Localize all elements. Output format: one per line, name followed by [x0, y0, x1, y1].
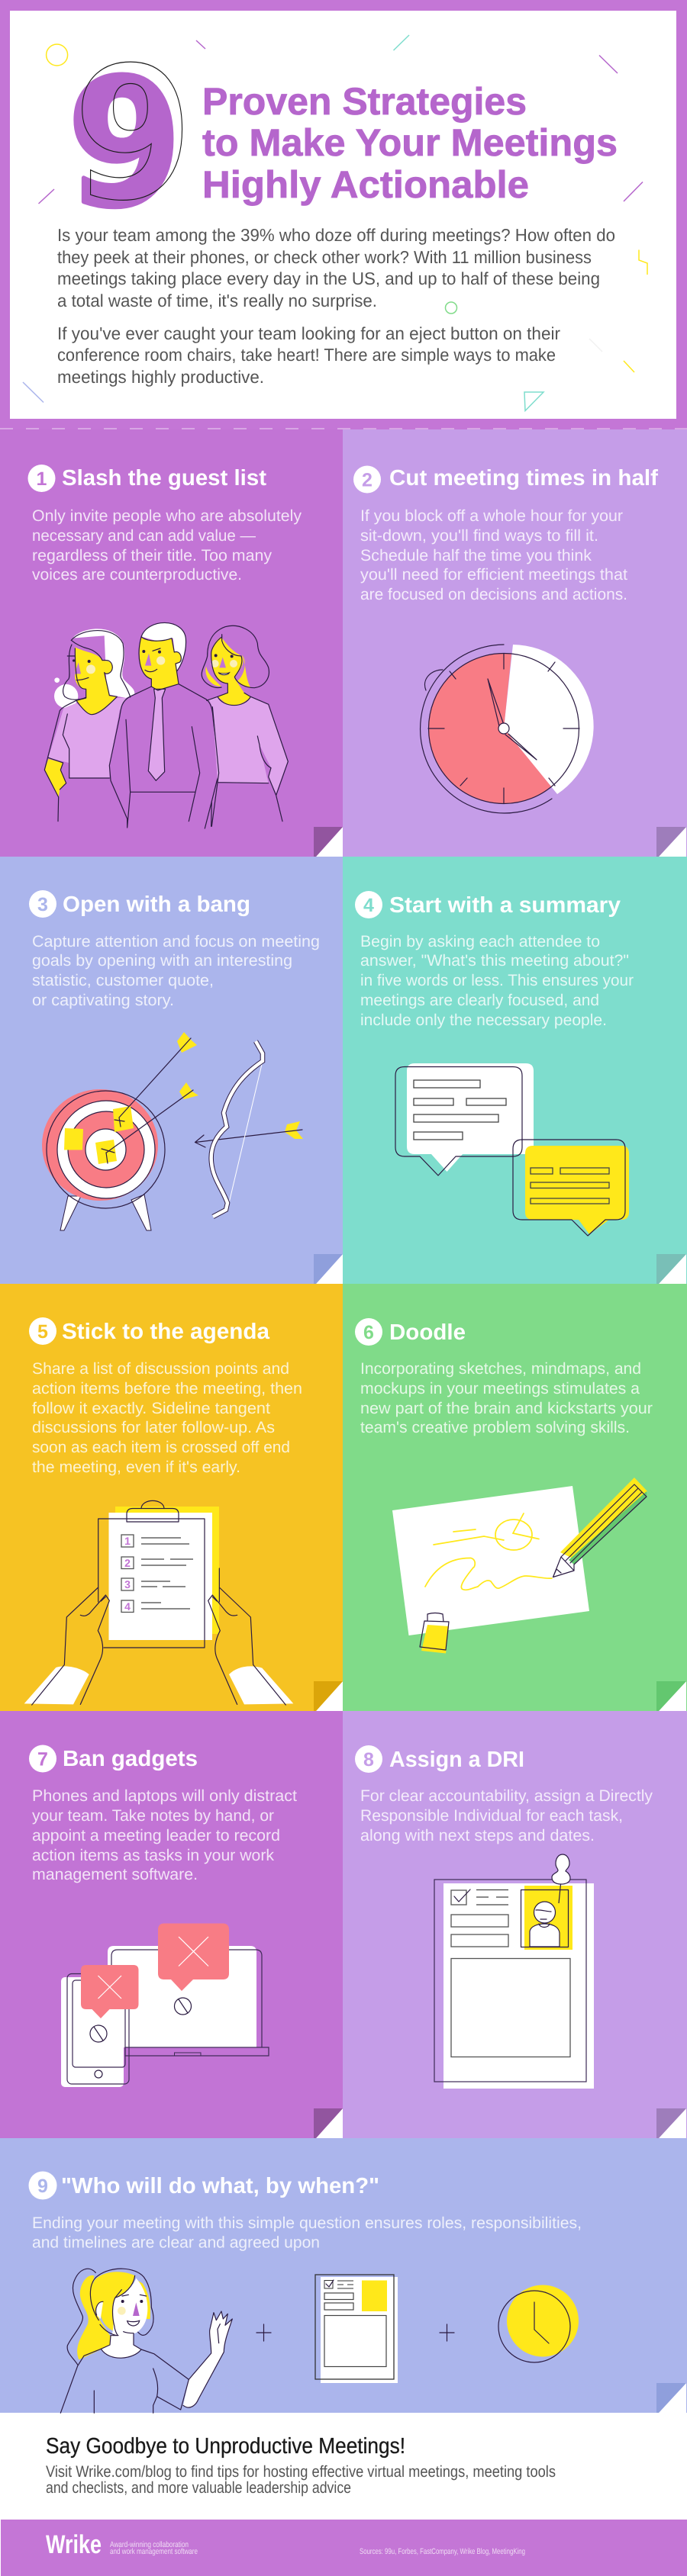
- plus sign: [440, 2324, 454, 2341]
- closing heading: Say Goodbye to Unproductive Meetings!: [46, 2434, 405, 2459]
- panel 6: doodle: [343, 1284, 687, 1711]
- illustration: clock: [498, 2285, 579, 2362]
- illustration: stopwatch: [421, 645, 594, 813]
- panel 2: cut meeting times in half: [343, 429, 687, 857]
- plus sign: [256, 2324, 271, 2341]
- illustration: clipboard and hands: 1: [124, 1535, 131, 1547]
- body text 4: in five words or less. This ensures your: [360, 972, 634, 989]
- panel 7: ban gadgets: [0, 1711, 343, 2138]
- big number nine: 9: [67, 43, 182, 246]
- heading 1: Slash the guest list: [62, 466, 266, 490]
- body text 7: Phones and laptops will only distract: [32, 1787, 297, 1805]
- heading 7: 7: [37, 1748, 48, 1770]
- body text 5: discussions for later follow-up. As: [32, 1419, 275, 1436]
- body text 3: [32, 933, 320, 1009]
- body text 1: [32, 507, 302, 584]
- body text 5: [32, 1360, 302, 1476]
- title: Highly Actionable: [202, 163, 529, 206]
- body text 6: team's creative problem solving skills.: [360, 1419, 630, 1436]
- panel 4: start with a summary: [343, 857, 687, 1284]
- body text 5: Share a list of discussion points and: [32, 1360, 289, 1378]
- big number nine: 9: [73, 27, 193, 241]
- illustration: speech bubbles: [395, 1063, 629, 1236]
- body text 2: are focused on decisions and actions.: [360, 586, 627, 603]
- illustration: clipboard and hands: 2: [124, 1557, 131, 1569]
- heading 5: 5: [37, 1321, 48, 1343]
- heading 7: Ban gadgets: [63, 1747, 198, 1771]
- body text 3: statistic, customer quote,: [32, 972, 214, 989]
- closing text: Visit Wrike.com/blog to find tips for hosting effective virtual meetings, meeting tools: [46, 2463, 556, 2481]
- intro text: they peek at their phones, or check other work? With 11 million business: [57, 247, 592, 267]
- body text 4: include only the necessary people.: [360, 1011, 607, 1029]
- heading 3: 3: [37, 894, 48, 915]
- body text 8: [360, 1787, 653, 1844]
- illustration: document: [315, 2275, 398, 2383]
- illustration: paper, pencil, eraser: [392, 1478, 647, 1654]
- body text 4: meetings are clearly focused, and: [360, 992, 599, 1009]
- tagline: and work management software: [110, 2547, 198, 2556]
- heading 4: 4: [363, 895, 374, 916]
- body text 4: answer, "What's this meeting about?": [360, 952, 629, 970]
- body text 3: or captivating story.: [32, 992, 174, 1009]
- heading 3: Open with a bang: [63, 892, 250, 917]
- illustration: three people: [44, 622, 288, 828]
- body text 5: soon as each item is crossed off end: [32, 1439, 290, 1456]
- illustration: waving woman: [60, 2269, 232, 2413]
- title: to Make Your Meetings: [202, 121, 618, 164]
- body text 6: new part of the brain and kickstarts your: [360, 1400, 653, 1417]
- body text 5: action items before the meeting, then: [32, 1380, 302, 1397]
- heading 8: Assign a DRI: [389, 1748, 524, 1772]
- body text 9: [32, 2214, 582, 2252]
- body text 8: Responsible Individual for each task,: [360, 1807, 623, 1825]
- panel 8: assign a DRI: [343, 1711, 687, 2138]
- body text 4: Begin by asking each attendee to: [360, 933, 600, 950]
- panel 5: stick to the agenda: [0, 1284, 343, 1711]
- body text 9: and timelines are clear and agreed upon: [32, 2233, 320, 2252]
- body text 7: action items as tasks in your work: [32, 1847, 274, 1864]
- body text 5: follow it exactly. Sideline tangent: [32, 1400, 270, 1417]
- body text 8: For clear accountability, assign a Directly: [360, 1787, 653, 1805]
- body text 2: you'll need for efficient meetings that: [360, 566, 627, 584]
- heading 4: Start with a summary: [389, 893, 621, 918]
- intro text: [57, 225, 615, 387]
- illustration: laptop and phone: [61, 1924, 269, 2087]
- illustration: target with arrows and bow: [42, 1032, 303, 1230]
- body text 3: goals by opening with an interesting: [32, 952, 292, 970]
- body text 2: If you block off a whole hour for your: [360, 507, 623, 525]
- heading 6: Doodle: [389, 1320, 466, 1345]
- illustration: clipboard and hands: 3: [124, 1578, 131, 1590]
- body text 1: regardless of their title. Too many: [32, 547, 273, 564]
- intro text: If you've ever caught your team looking for an eject button on their: [57, 323, 560, 343]
- header panel: [0, 0, 687, 430]
- heading 5: Stick to the agenda: [62, 1320, 270, 1344]
- body text 2: Schedule half the time you think: [360, 547, 592, 564]
- body text 1: voices are counterproductive.: [32, 566, 242, 584]
- heading 1: 1: [37, 468, 47, 490]
- body text 9: Ending your meeting with this simple question ensures roles, responsibilities,: [32, 2214, 582, 2232]
- body text 7: [32, 1787, 297, 1883]
- heading 2: 2: [362, 470, 373, 491]
- body text 7: your team. Take notes by hand, or: [32, 1807, 274, 1825]
- heading 6: 6: [363, 1322, 374, 1343]
- intro text: a total waste of time, it's really no surprise.: [57, 291, 377, 310]
- sources: Sources: 99u, Forbes, FastCompany, Wrike Blog, MeetingKing: [360, 2547, 525, 2556]
- tagline: Award-winning collaboration: [110, 2540, 189, 2549]
- body text 4: [360, 933, 634, 1029]
- body text 1: Only invite people who are absolutely: [32, 507, 302, 525]
- intro text: meetings highly productive.: [57, 367, 264, 387]
- tagline: [110, 2540, 198, 2556]
- closing text: [46, 2463, 556, 2497]
- panel 9: who will do what, by when: [0, 2138, 687, 2413]
- illustration: clipboard and hands: 4: [124, 1600, 131, 1613]
- illustration: pinned document: [434, 1854, 594, 2089]
- heading 6: [355, 1318, 466, 1346]
- panel 1: slash the guest list: [0, 429, 343, 857]
- body text 2: [360, 507, 627, 603]
- heading 9: 9: [37, 2176, 48, 2197]
- body text 7: management software.: [32, 1866, 198, 1883]
- panel 3: open with a bang: [0, 857, 343, 1284]
- intro text: Is your team among the 39% who doze off during meetings? How often do: [57, 225, 615, 245]
- body text 1: necessary and can add value —: [32, 527, 256, 545]
- intro text: conference room chairs, take heart! There are simple ways to make: [57, 345, 556, 365]
- heading 2: Cut meeting times in half: [389, 466, 658, 490]
- heading 7: [29, 1745, 198, 1773]
- body text 5: the meeting, even if it's early.: [32, 1458, 240, 1476]
- heading 8: 8: [363, 1749, 374, 1770]
- body text 3: Capture attention and focus on meeting: [32, 933, 320, 950]
- body text 7: appoint a meeting leader to record: [32, 1827, 280, 1844]
- heading 9: "Who will do what, by when?": [61, 2174, 379, 2198]
- footer: [1, 2520, 687, 2576]
- body text 2: sit-down, you'll find ways to fill it.: [360, 527, 598, 545]
- intro text: meetings taking place every day in the US, and up to half of these being: [57, 269, 600, 288]
- title: Proven Strategies: [202, 80, 527, 123]
- title: [202, 80, 618, 206]
- illustration: clipboard and hands: [24, 1500, 293, 1705]
- body text 6: [360, 1360, 653, 1436]
- closing text: and checlists, and more valuable leadership advice: [46, 2479, 351, 2497]
- body text 6: mockups in your meetings stimulates a: [360, 1380, 640, 1397]
- body text 8: along with next steps and dates.: [360, 1827, 595, 1844]
- wrike logo: Wrike: [46, 2530, 102, 2559]
- body text 6: Incorporating sketches, mindmaps, and: [360, 1360, 641, 1378]
